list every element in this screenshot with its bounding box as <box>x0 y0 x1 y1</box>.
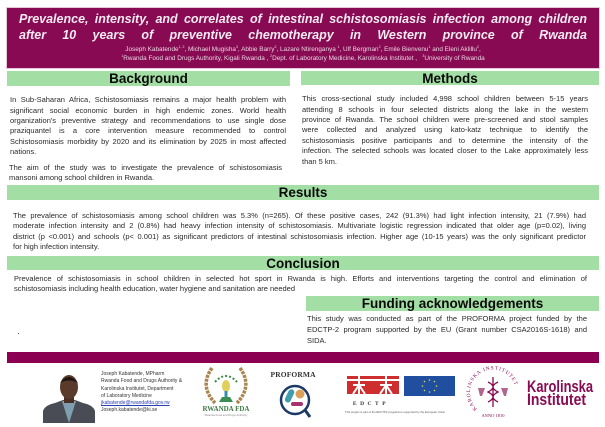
poster title: Prevalence, intensity, and correlates of intestinal schistosomiasis infection among children <box>19 12 587 26</box>
heading: background <box>7 71 290 86</box>
panel: background <box>7 71 290 182</box>
authors and affiliations <box>121 45 485 62</box>
author contact details <box>100 371 182 413</box>
background text: The aim of the study was to investigate the prevalence of schistosomiasis <box>9 163 282 172</box>
background text: Schistosomiasis morbidity by 2020 and its elimination by 2025 in most affected <box>10 137 286 146</box>
logo: EDCTP: EDCTP <box>353 401 389 407</box>
heading: methods: Methods <box>422 71 478 86</box>
heading: results: Results <box>279 185 327 200</box>
author contact details: Joseph Kabatende, MPharm <box>101 371 164 377</box>
logo: EU flag <box>404 376 455 396</box>
heading: conclusion <box>7 256 599 270</box>
background text: mansoni among school children in Rwanda. <box>9 173 154 182</box>
heading: funding acknowledgements: Funding acknowledgements <box>362 296 543 311</box>
logo: Karolinska Institutet: ANNO 1810 <box>481 413 505 418</box>
logo: Rwanda FDA <box>202 367 250 417</box>
results text: district (p <0.001) and schools (p< 0.001) as significant predictors of intestinal schistosomiasis infection. Higher age (10-15 years) was the only significant predictor <box>13 232 586 241</box>
author contact details: Rwanda Food and Drugs Authority & <box>101 378 182 384</box>
stray dot <box>18 333 19 334</box>
panel: funding acknowledgements <box>306 296 599 345</box>
logo: EDCTP <box>347 376 399 407</box>
panel: conclusion <box>7 256 599 293</box>
authors and affiliations: 1Rwanda Food and Drugs Authority, Kigali Rwanda , 2Dept. of Laboratory Medicine, Karolinska Institutet , 3University of Rwanda <box>121 54 485 62</box>
logo: Rwanda FDA: Rwanda Food and Drugs Authority <box>205 413 248 417</box>
authors and affiliations: Joseph Kabatende1, 2, Michael Mugisha3, Abbie Barry2, Lazare Ntirenganya 1, Ulf Bergman2, Emile Bienvenu1 and Eleni Aklillu2, <box>125 45 481 53</box>
panel: methods <box>301 71 599 166</box>
footer band <box>7 352 599 363</box>
background text: nations. <box>10 147 36 156</box>
methods text: This cross-sectional study included 4,998 school children between 5-15 years <box>302 94 588 103</box>
background text: In Sub-Saharan Africa, Schistosomiasis remains a major health problem with <box>10 95 286 104</box>
heading: results <box>7 185 599 200</box>
background text: praziquantel is a core intervention measure recommended to control <box>10 126 286 135</box>
methods text: than 5 km. <box>302 157 337 166</box>
author contact details: Karolinska Institutet, Department <box>101 386 174 392</box>
poster title <box>19 12 587 42</box>
heading: conclusion: Conclusion <box>266 256 340 271</box>
photo: author portrait <box>43 375 95 423</box>
results text: moderate infection intensity and 2 (0.8%) had heavy infection intensity of schistosomiasis. Multivariate logistic regression indicated that older age (p=0.02), living <box>13 221 586 230</box>
title banner <box>7 8 599 68</box>
heading: funding acknowledgements <box>306 296 599 311</box>
author contact details: of Laboratory Medicine <box>101 393 152 399</box>
logo: Karolinska Institutet <box>466 366 594 418</box>
conclusion text: schistosomiasis including health education, water hygiene and sanitation are needed <box>14 284 295 293</box>
funding text: SIDA. <box>307 336 327 345</box>
panel: results <box>7 185 599 251</box>
conclusion text: Prevalence of schistosomiasis in school children in selected hot sport in Rwanda is high. Efforts and interventions targeting the control and elimination of <box>14 274 587 283</box>
methods text: province of Rwanda. The school children were pre-screened and stool samples <box>302 115 588 124</box>
author contact details: jkabatende@rwandafda.gov.rw <box>101 400 170 406</box>
conclusion text <box>14 274 587 293</box>
funding text <box>307 314 587 345</box>
logo: Karolinska Institutet: KAROLINSKA INSTITUTET <box>466 366 518 412</box>
methods text: were collected and analyzed using kato-katz technique to identify the <box>302 125 588 134</box>
background text <box>9 95 286 182</box>
background text: significant social economic burden in high endemic zones. World health <box>10 106 286 115</box>
logo: PROFORMA <box>270 370 316 418</box>
logo: Karolinska Institutet: Institutet <box>527 391 586 409</box>
author contact details: Joseph.kabatende@ki.se <box>101 407 157 413</box>
logo: Rwanda FDA: RWANDA FDA <box>202 405 250 413</box>
heading: background: Background <box>109 71 188 86</box>
results text <box>13 211 586 251</box>
heading: methods <box>301 71 599 85</box>
methods text: attending 8 schools in four selected districts along the lake in the western <box>302 105 588 114</box>
methods text: schistosomiasis positive participants and to determine the intensity of the <box>302 136 588 145</box>
EU funding statement: This project is part of the EDCTP2 programme supported by the European Union <box>345 410 445 414</box>
funding text: This study was conducted as part of the PROFORMA project funded by the <box>307 314 587 323</box>
methods text: infection. The selected schools was located closer to the Lake approximately less <box>302 146 588 155</box>
results text: The prevalence of schistosomiasis among school children was 5.3% (n=265). Of these positive cases, 242 (91.3%) had light infection intensity, 21 (7.9%) had <box>13 211 586 220</box>
methods text <box>302 94 588 166</box>
background text: organization's preventive strategy and recommendations to use single dose <box>10 116 286 125</box>
funding text: EDCTP-2 program supported by the EU (Grant number CSA2016S-1618) and <box>307 325 587 334</box>
logo: PROFORMA: PROFORMA <box>270 370 316 379</box>
poster title: after 10 years of preventive chemotherapy in Western province of Rwanda <box>19 28 587 42</box>
results text: for high infection intensity. <box>13 242 99 251</box>
